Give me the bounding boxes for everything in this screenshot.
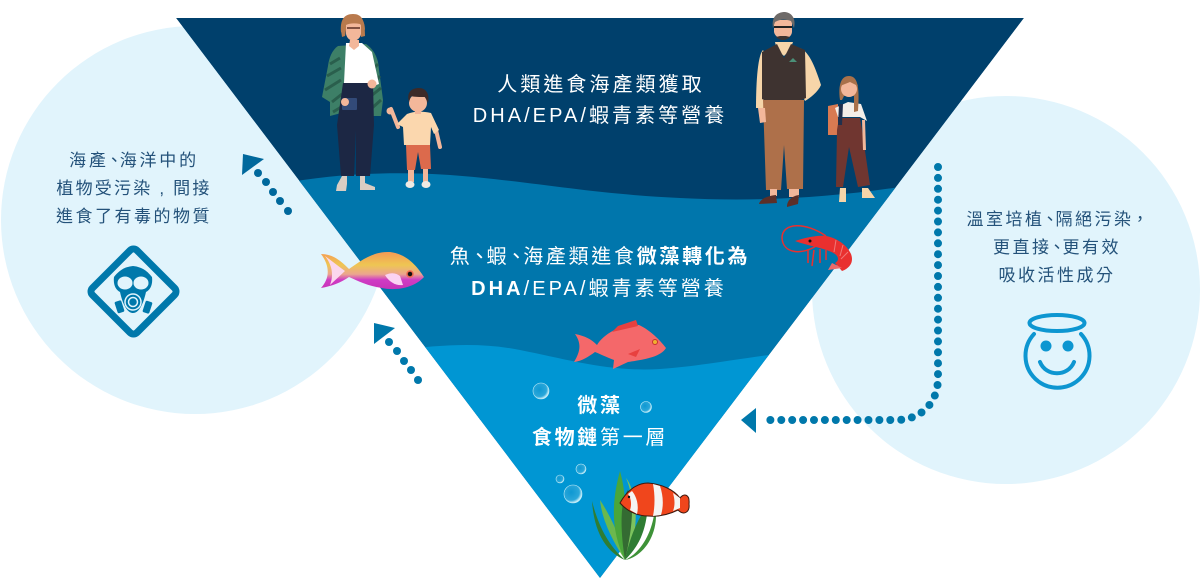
- illustration: red shrimp: [782, 226, 852, 271]
- text: microalgae layer: 微藻: [577, 394, 623, 417]
- panel: left circle: [1, 26, 389, 414]
- arrow: lower left dotted: [374, 323, 422, 384]
- text: human layer: DHA/EPA/蝦青素等營養: [473, 104, 727, 127]
- figure: man: [756, 12, 821, 207]
- panel: right circle: [812, 96, 1200, 484]
- text: left circle: 海產、海洋中的: [69, 151, 199, 170]
- icon: gas mask warning diamond: [89, 247, 178, 336]
- arrow: right dotted path to triangle: [741, 167, 938, 433]
- text: human layer: 人類進食海產類獲取: [497, 73, 705, 96]
- text: fish and shrimp layer: 魚、蝦、海產類進食微藻轉化為: [450, 245, 750, 268]
- figure: boy: [386, 88, 440, 188]
- text: microalgae layer: 食物鏈第一層: [532, 425, 668, 449]
- arrow: upper left dotted: [242, 154, 292, 215]
- text: right circle: 吸收活性成分: [998, 266, 1116, 285]
- text: microalgae layer: [532, 394, 668, 449]
- panel: inverted food chain triangle: [176, 18, 1024, 580]
- illustration: bubbles: [533, 383, 652, 503]
- illustration: clownfish: [620, 483, 689, 516]
- figure: girl: [828, 76, 875, 202]
- text: right circle: 更直接、更有效: [993, 238, 1121, 257]
- middle layer: fish and shrimp: [280, 173, 930, 420]
- text: fish and shrimp layer: [450, 245, 750, 300]
- top layer: humans: [176, 18, 1024, 578]
- text: right circle: [966, 210, 1146, 285]
- text: human layer: [473, 73, 727, 127]
- text: left circle: 進食了有毒的物質: [56, 207, 212, 226]
- figure: woman: [322, 14, 383, 191]
- text: fish and shrimp layer: DHA/EPA/蝦青素等營養: [471, 277, 727, 300]
- illustration: red snapper fish: [574, 320, 666, 369]
- text: left circle: [56, 151, 212, 226]
- icon: smiling face with halo: [1026, 315, 1090, 388]
- text: right circle: 溫室培植、隔絕污染，: [966, 210, 1146, 229]
- bottom layer: microalgae: [425, 345, 769, 578]
- illustration: pink and yellow fish: [321, 252, 424, 289]
- text: left circle: 植物受污染 , 間接: [56, 179, 212, 198]
- illustration: seaweed: [592, 471, 656, 560]
